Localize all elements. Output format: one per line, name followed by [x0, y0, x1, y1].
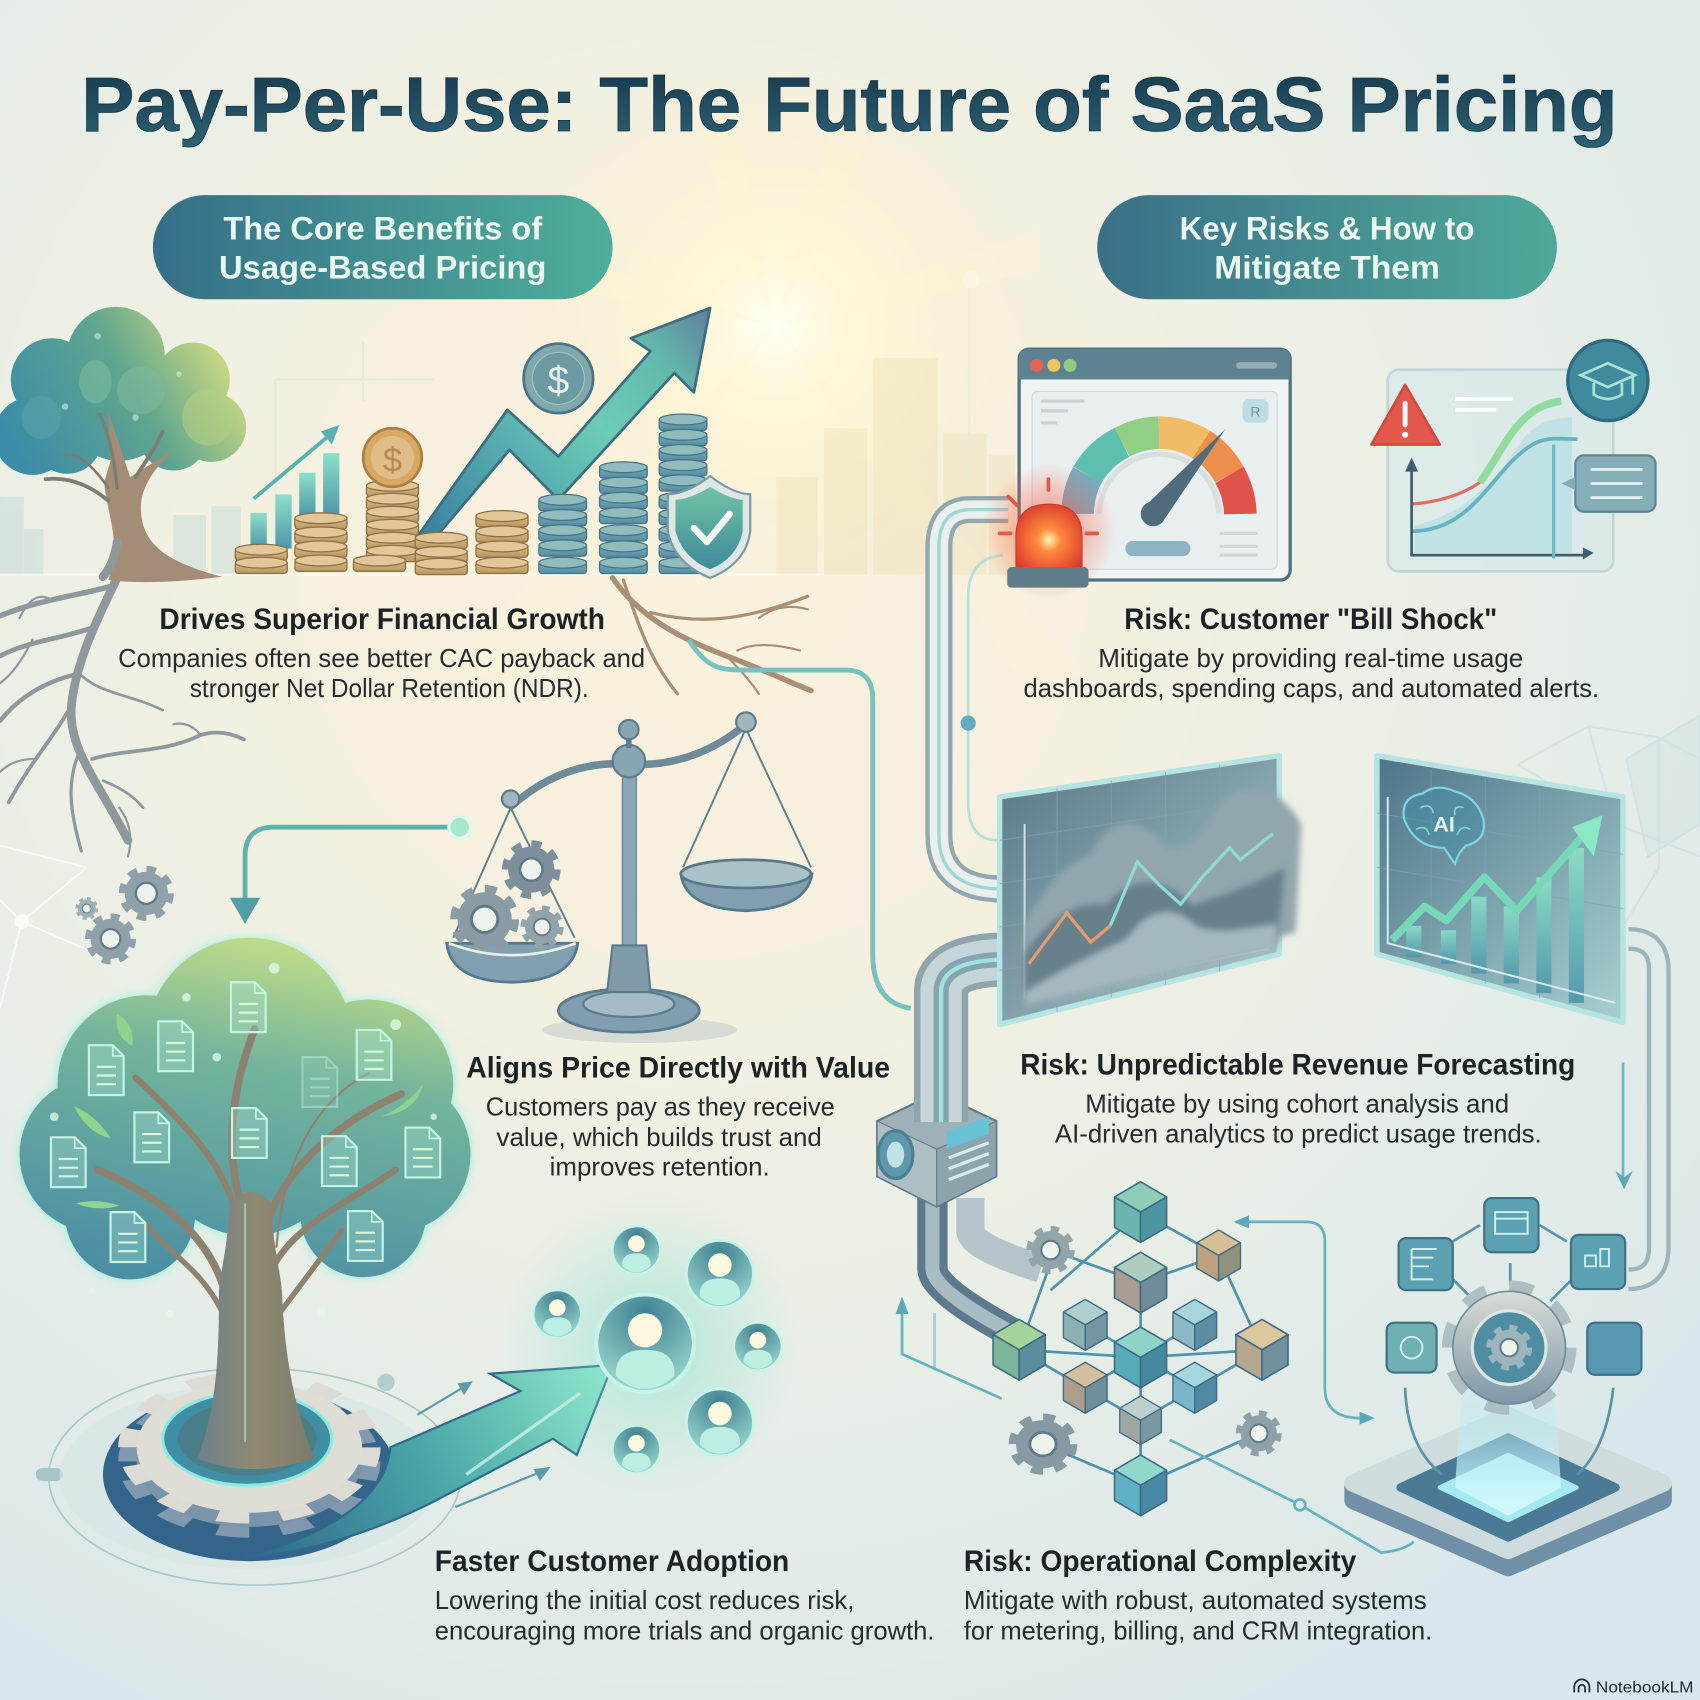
background network left — [0, 846, 98, 1008]
documents — [51, 982, 440, 1262]
callout — [1561, 455, 1656, 512]
canopy — [20, 938, 471, 1279]
NotebookLM mark: NotebookLM — [1596, 1679, 1693, 1696]
icon: small gears — [77, 870, 170, 961]
text: bill shock: Mitigate by providing real-time usage — [1098, 643, 1523, 673]
icon: AI brain: AI — [1433, 812, 1455, 837]
heading pill: core benefits — [153, 195, 613, 299]
heading pill: key risks: Key Risks & How to — [1180, 211, 1474, 247]
connectors around network — [902, 1222, 1414, 1553]
illustration: cube network — [993, 1182, 1288, 1516]
text: financial growth: stronger Net Dollar Retention (NDR). — [190, 673, 589, 703]
illustration: blue coin stacks — [539, 414, 707, 574]
illustration: gold coin stacks — [235, 428, 528, 575]
gauge — [1078, 433, 1240, 514]
text: faster adoption — [435, 1546, 935, 1645]
text: operational complexity: for metering, billing, and CRM integration. — [964, 1615, 1432, 1645]
cube 11 — [1120, 1396, 1161, 1445]
roots right — [613, 578, 811, 694]
leaves and sparkles — [50, 963, 437, 1318]
illustration: customers network — [499, 1193, 802, 1496]
illustration: growth tree with roots — [0, 307, 246, 857]
illustration: gold coin stacks: $ — [383, 442, 402, 480]
text: aligns price: improves retention. — [550, 1151, 770, 1181]
tree canopy — [0, 307, 246, 475]
text: forecasting — [1020, 1049, 1575, 1149]
arrow: from scale to document tree — [230, 816, 471, 924]
arrow: into automation hub — [1615, 1062, 1633, 1189]
illustration: mitigation chart — [1371, 340, 1656, 571]
trunk and branches — [98, 1029, 401, 1469]
icon: red alarm — [981, 464, 1116, 598]
right pan — [681, 874, 812, 911]
text: financial growth — [118, 604, 645, 703]
text: faster adoption: Lowering the initial cost reduces risk, — [435, 1585, 854, 1615]
text: bill shock: dashboards, spending caps, and automated alerts. — [1023, 673, 1599, 703]
illustration: central pipe junction — [877, 960, 1041, 1334]
cube 8 — [1115, 1327, 1167, 1388]
cube 4 — [1063, 1299, 1107, 1350]
orbit arrows — [1405, 1225, 1613, 1474]
text: operational complexity: Risk: Operational Complexity — [964, 1546, 1357, 1578]
heading pill: key risks — [1097, 195, 1557, 299]
illustration: automation hub — [1353, 1198, 1663, 1568]
text: faster adoption: Faster Customer Adoption — [435, 1546, 789, 1578]
icon: graduation badge — [1568, 340, 1648, 421]
illustration: dollar coin teal — [524, 344, 593, 413]
illustration: AI forecast screen — [1377, 756, 1623, 1022]
text: aligns price: value, which builds trust and — [497, 1122, 822, 1152]
tiles — [1387, 1198, 1641, 1375]
illustration: balance scale — [447, 712, 812, 1043]
text: operational complexity: Mitigate with robust, automated systems — [964, 1585, 1427, 1615]
text: financial growth: Drives Superior Financial Growth — [159, 604, 605, 636]
text: operational complexity — [964, 1546, 1432, 1645]
heading pill: key risks: Mitigate Them — [1214, 250, 1440, 286]
central gear — [1451, 1289, 1568, 1406]
heading pill: core benefits: Usage-Based Pricing — [219, 250, 546, 286]
heading pill: core benefits: The Core Benefits of — [223, 211, 542, 247]
cube 10 — [1173, 1362, 1217, 1413]
title: Pay-Per-Use: The Future of SaaS Pricing — [81, 62, 1618, 148]
illustration: document tree on gear — [20, 938, 471, 1585]
illustration: volatile revenue screen — [1000, 756, 1301, 1025]
illustration: dollar coin teal: $ — [548, 360, 570, 403]
illustration: usage gauge window — [1019, 349, 1290, 580]
light beam — [1455, 1366, 1561, 1516]
cube 12 — [1115, 1455, 1167, 1516]
text: aligns price — [466, 1053, 890, 1181]
connector: teal line to centre — [688, 640, 911, 1008]
text: faster adoption: encouraging more trials and organic growth. — [435, 1615, 935, 1645]
illustration: large growth arrow — [417, 308, 710, 537]
pipe: right side — [1628, 939, 1659, 1279]
network gears — [1014, 1229, 1278, 1470]
background skyline — [0, 271, 1015, 575]
cube 3 — [1115, 1252, 1167, 1313]
text: bill shock — [1023, 604, 1599, 703]
platform — [1353, 1416, 1663, 1568]
text: bill shock: Risk: Customer "Bill Shock" — [1124, 604, 1497, 636]
cube 9 — [1063, 1362, 1107, 1413]
cube 2 — [1197, 1230, 1240, 1281]
text: aligns price: Aligns Price Directly with Value — [466, 1053, 890, 1085]
cube 1 — [1115, 1182, 1167, 1242]
illustration: usage gauge window: R — [1250, 403, 1261, 419]
text: forecasting: Mitigate by using cohort analysis and — [1085, 1088, 1509, 1118]
text: forecasting: AI-driven analytics to predict usage trends. — [1055, 1119, 1542, 1149]
text: forecasting: Risk: Unpredictable Revenue Forecasting — [1020, 1049, 1575, 1081]
left pan with gears — [447, 845, 578, 982]
arrow: adoption — [244, 1365, 613, 1558]
text: financial growth: Companies often see better CAC payback and — [118, 643, 645, 673]
cube 7 — [1236, 1319, 1288, 1380]
cube 6 — [993, 1319, 1045, 1380]
illustration: mini bar chart — [250, 425, 339, 549]
background network right — [1518, 716, 1700, 922]
icon: AI brain — [1404, 788, 1484, 864]
icon: shield — [668, 476, 750, 578]
cube 5 — [1173, 1299, 1217, 1350]
pipe: from alarm to forecasting screen — [939, 510, 1008, 889]
gear platform — [36, 1368, 461, 1585]
icon: warning — [1371, 385, 1440, 445]
text: aligns price: Customers pay as they receive — [486, 1092, 835, 1122]
